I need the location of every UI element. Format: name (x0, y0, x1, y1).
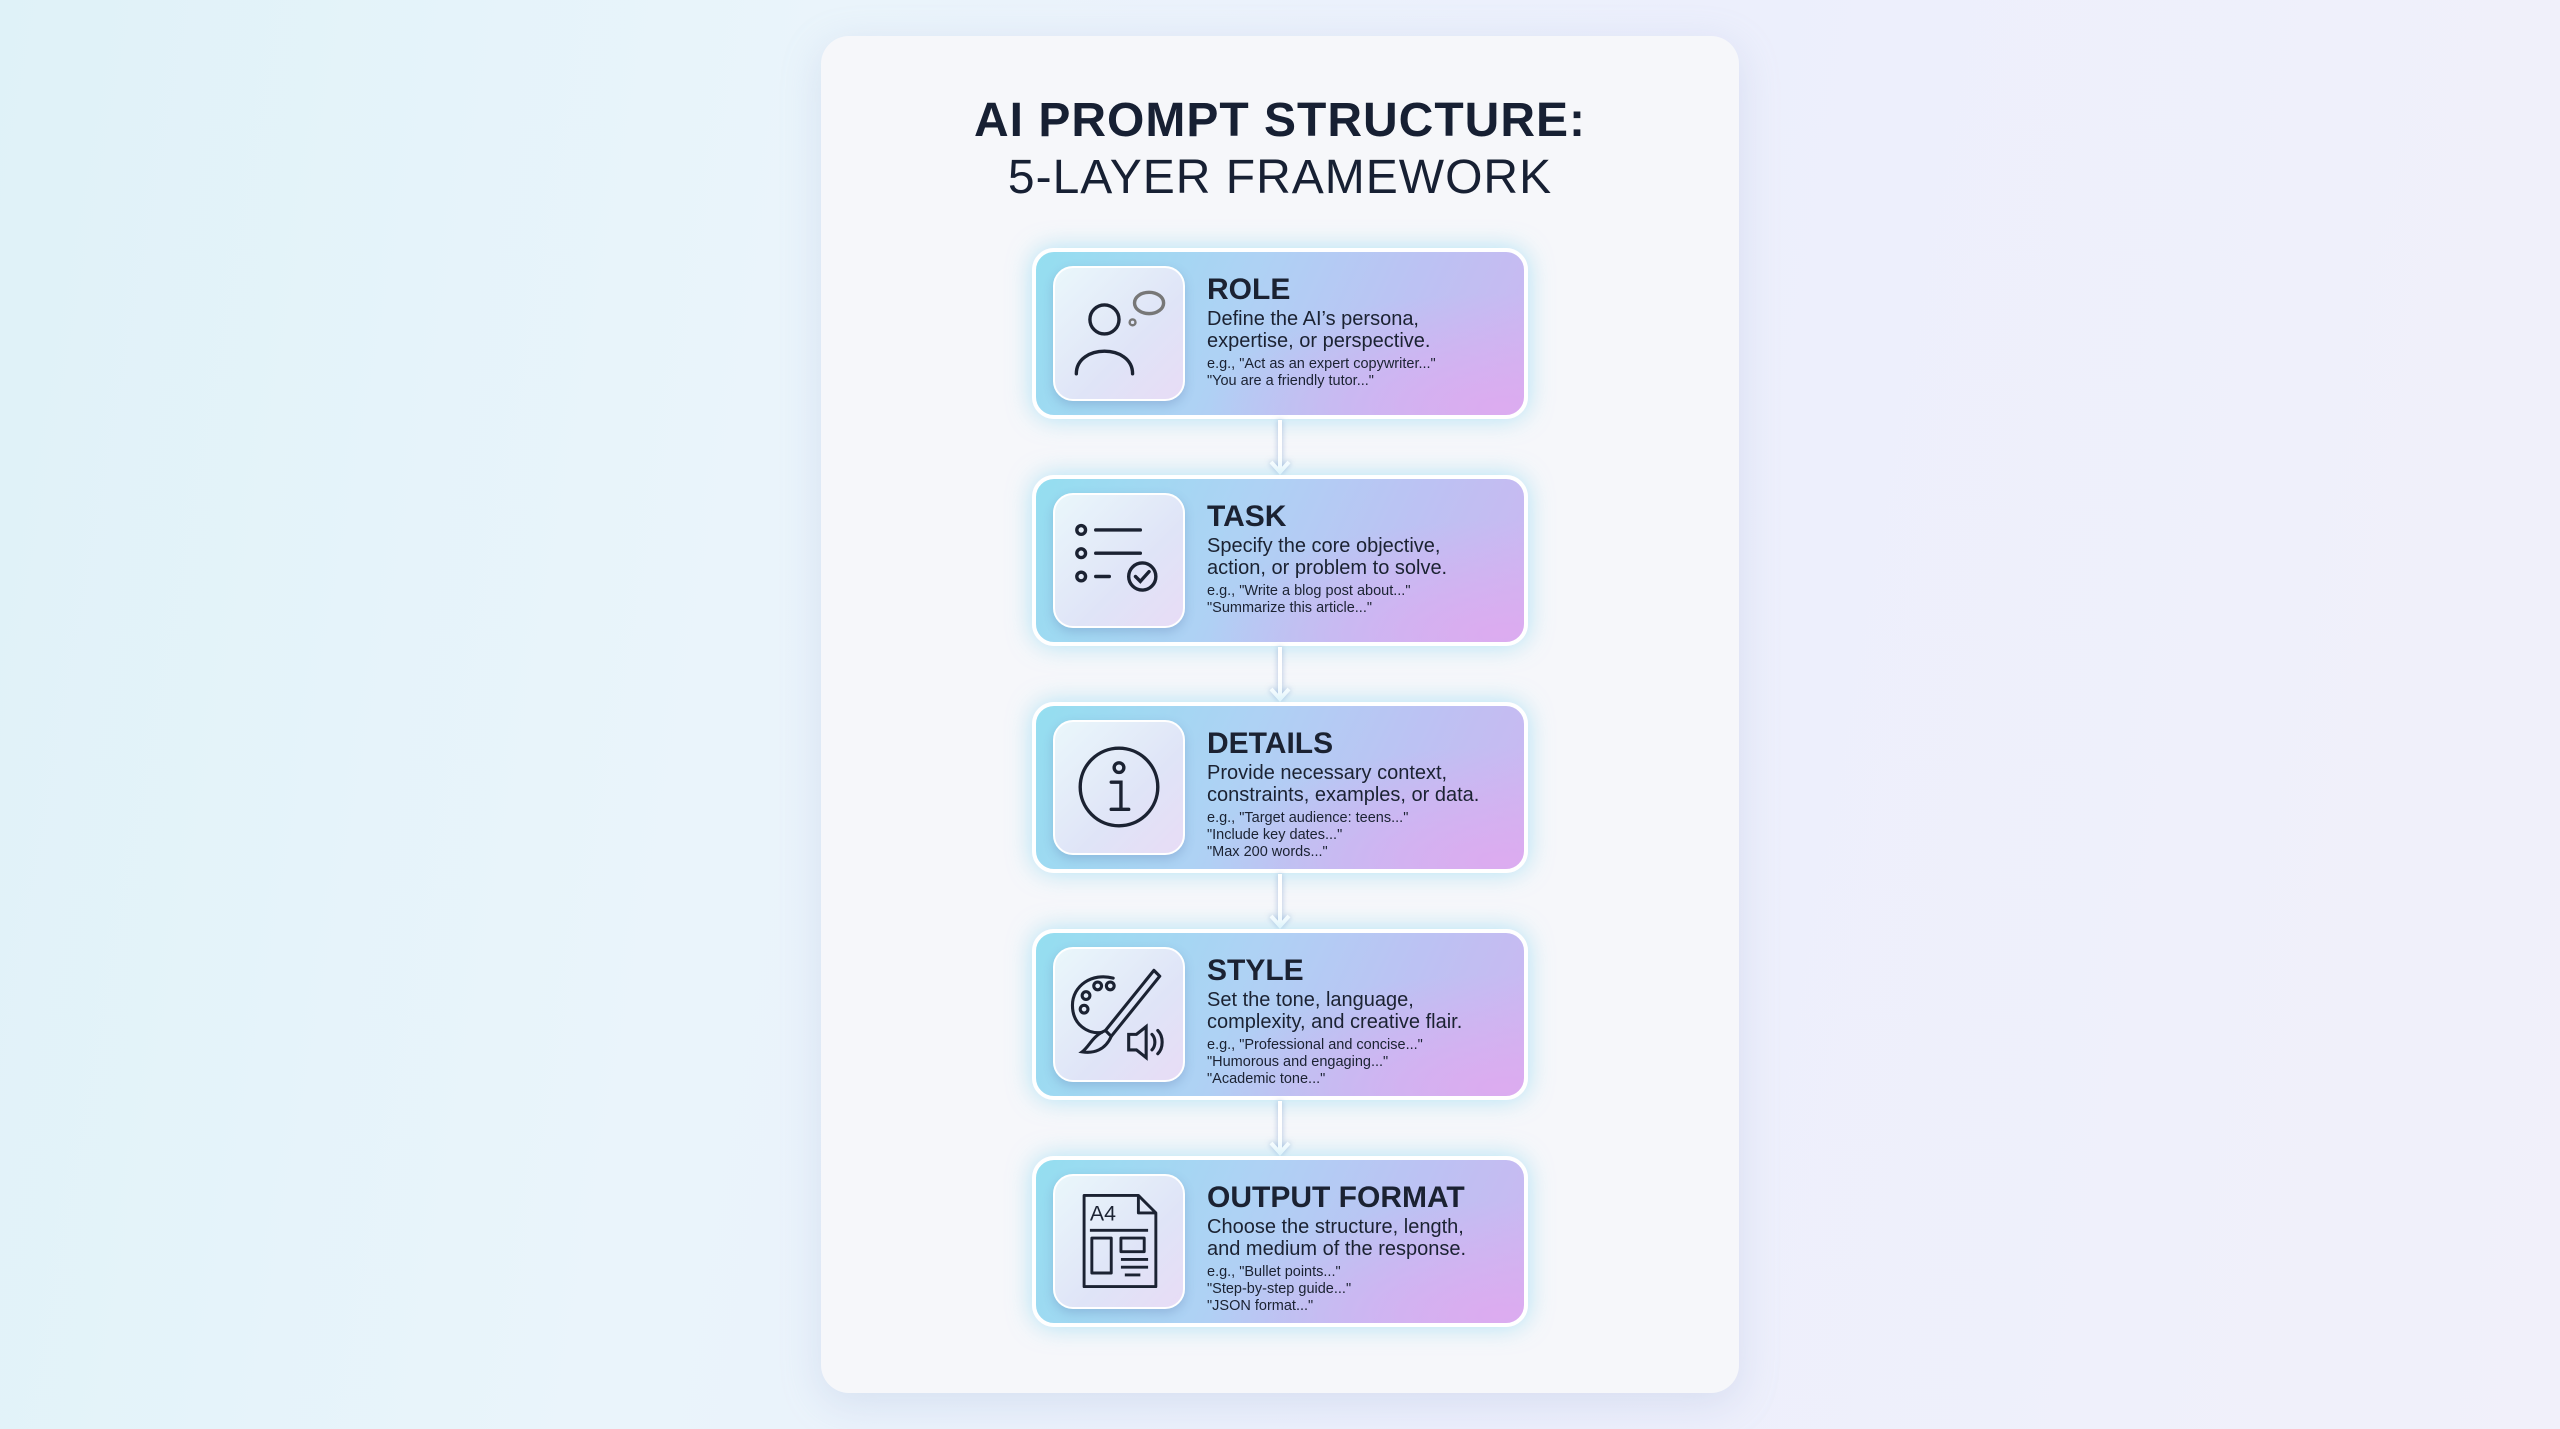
arrow (1268, 644, 1292, 702)
text: role: "You are a friendly tutor..." (1207, 373, 1374, 389)
title (974, 94, 1586, 204)
panel: details (1032, 702, 1528, 873)
text: task: action, or problem to solve. (1207, 557, 1447, 579)
arrow (1268, 1098, 1292, 1156)
title: AI PROMPT STRUCTURE: (974, 94, 1586, 147)
text: details: e.g., "Target audience: teens..." (1207, 810, 1408, 826)
text: style: "Academic tone..." (1207, 1071, 1325, 1087)
text: task: "Summarize this article..." (1207, 600, 1372, 616)
panel: style (1032, 929, 1528, 1100)
text: role (1207, 273, 1436, 389)
text: details: DETAILS (1207, 727, 1333, 760)
text: output format: Choose the structure, length, (1207, 1216, 1464, 1238)
icon: person with thought bubble (1053, 266, 1185, 401)
text: output format: and medium of the response. (1207, 1238, 1466, 1260)
text: style: "Humorous and engaging..." (1207, 1054, 1388, 1070)
text: role: e.g., "Act as an expert copywriter..." (1207, 356, 1436, 372)
text: details: "Max 200 words..." (1207, 844, 1328, 860)
text: task: Specify the core objective, (1207, 535, 1440, 557)
text: details: Provide necessary context, (1207, 762, 1447, 784)
panel: role (1032, 248, 1528, 419)
text: task: e.g., "Write a blog post about..." (1207, 583, 1410, 599)
icon: checklist (1053, 493, 1185, 628)
text: output format (1207, 1181, 1466, 1314)
text: style: STYLE (1207, 954, 1304, 987)
text: style: e.g., "Professional and concise..." (1207, 1037, 1423, 1053)
text: task: TASK (1207, 500, 1286, 533)
text: output format: OUTPUT FORMAT (1207, 1181, 1465, 1214)
title: 5-LAYER FRAMEWORK (1008, 151, 1552, 204)
arrow (1268, 872, 1292, 929)
card panel (821, 36, 1739, 1393)
panel: output format (1032, 1156, 1528, 1327)
text: output format: "JSON format..." (1207, 1298, 1313, 1314)
panel: task (1032, 475, 1528, 646)
text: role: Define the AI’s persona, (1207, 308, 1419, 330)
icon: A4 document (1053, 1174, 1185, 1309)
text: role: expertise, or perspective. (1207, 330, 1430, 352)
text: details: constraints, examples, or data. (1207, 784, 1479, 806)
text: output format: "Step-by-step guide..." (1207, 1281, 1351, 1297)
icon: A4 document: A4 (1090, 1202, 1116, 1226)
text: details (1207, 727, 1479, 860)
text: style: Set the tone, language, (1207, 989, 1414, 1011)
text: style (1207, 954, 1462, 1087)
text: role: ROLE (1207, 273, 1290, 306)
text: details: "Include key dates..." (1207, 827, 1342, 843)
icon: info (1053, 720, 1185, 855)
text: task (1207, 500, 1447, 616)
icon: palette brush speaker (1053, 947, 1185, 1082)
text: output format: e.g., "Bullet points..." (1207, 1264, 1341, 1280)
text: style: complexity, and creative flair. (1207, 1011, 1462, 1033)
arrow (1268, 418, 1292, 475)
